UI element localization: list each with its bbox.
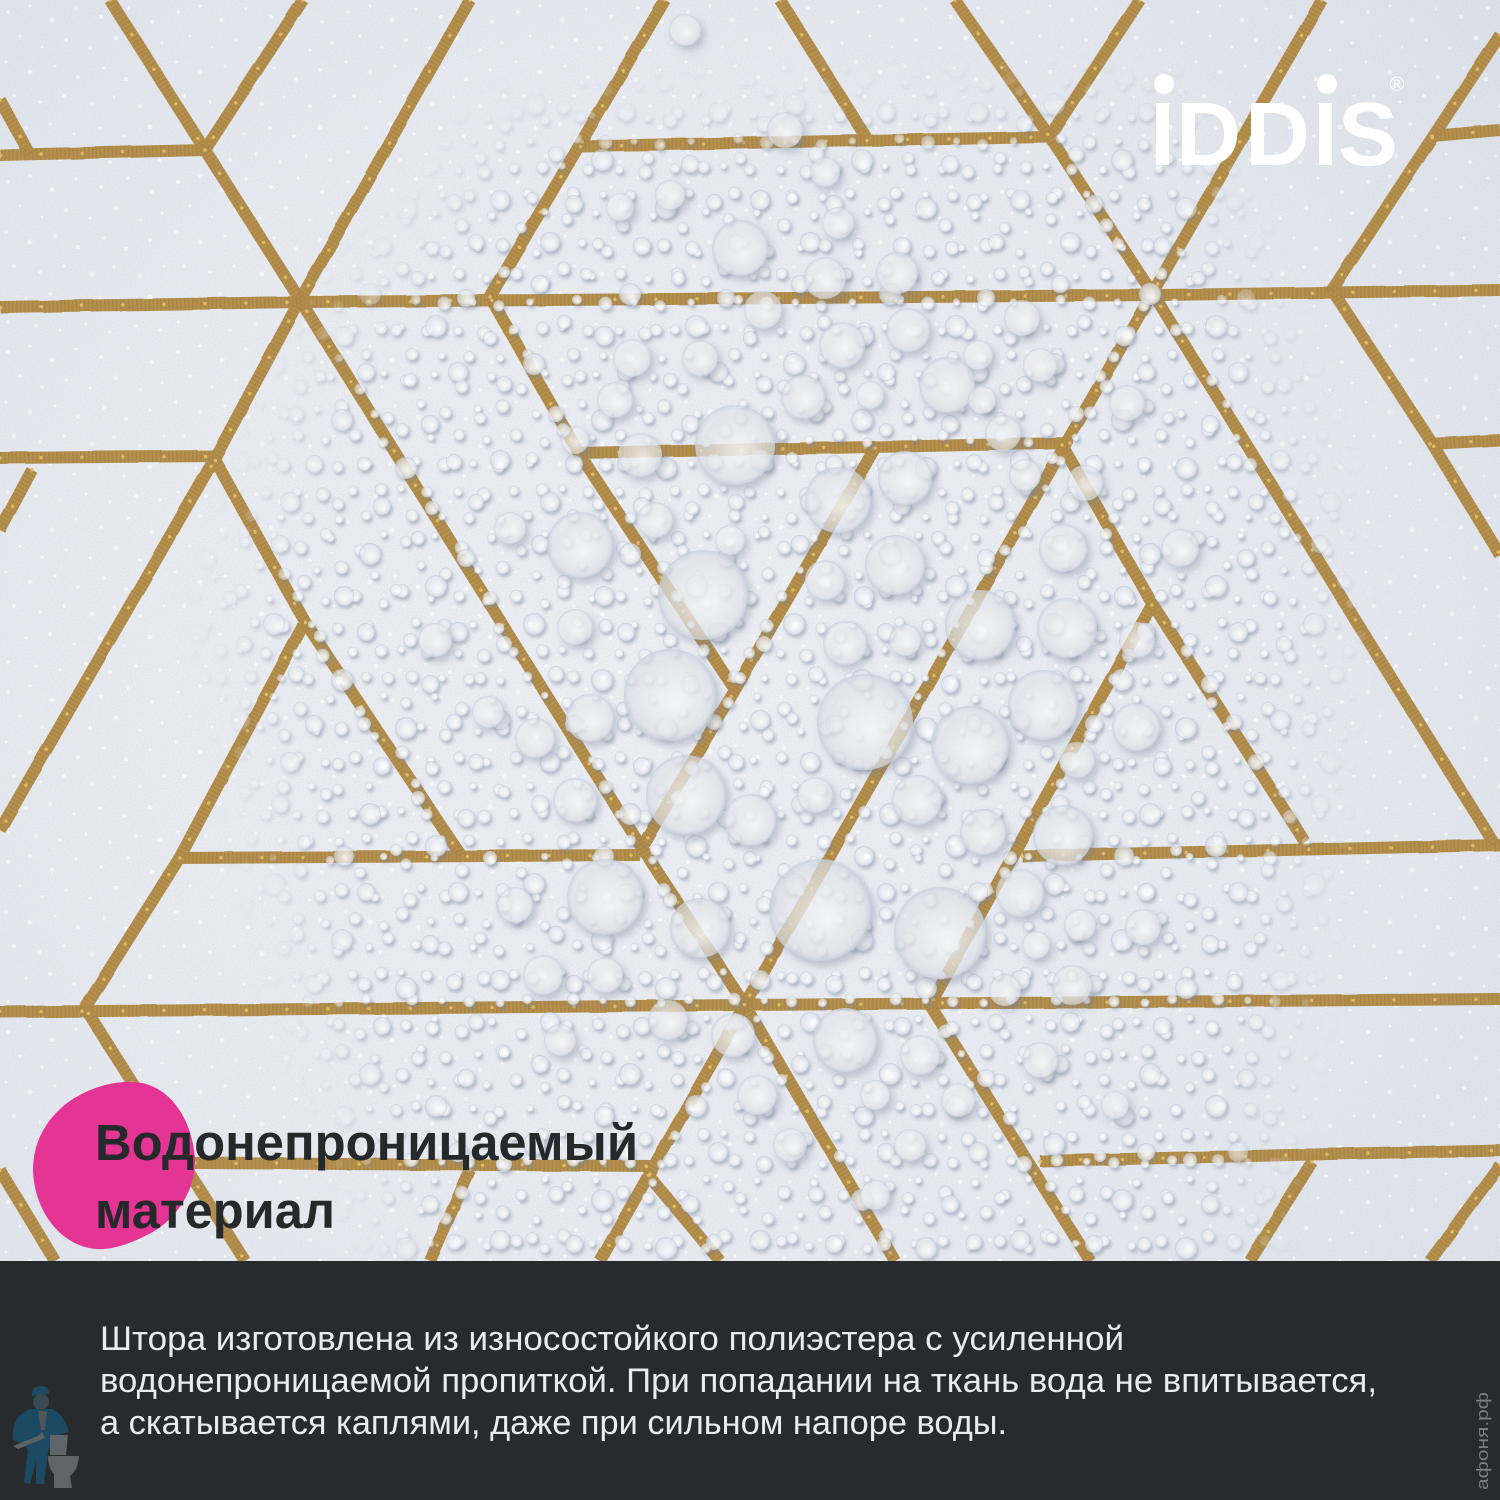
icon: plumber with toilet watermark [13, 1386, 79, 1488]
description text: а скатывается каплями, даже при сильном напоре воды. [100, 1404, 1007, 1442]
description text [100, 1320, 1377, 1442]
description text: Штора изготовлена из износостойкого полиэстера с усиленной [100, 1320, 1124, 1358]
description text: водонепроницаемой пропиткой. При попадании на ткань вода не впитывается, [100, 1362, 1377, 1400]
heading: материал [95, 1182, 335, 1239]
watermark: afonya.rf: афоня.рф [1473, 1392, 1492, 1490]
medium water droplets [220, 62, 1371, 1261]
large water droplets [418, 14, 1199, 1210]
pink blob accent [33, 1082, 195, 1249]
logo: IDDIS: ® [1390, 74, 1405, 96]
logo: IDDIS: IDDIS [1150, 85, 1398, 185]
heading [95, 1114, 638, 1239]
heading: Водонепроницаемый [95, 1114, 638, 1171]
panel: dark description band [0, 1261, 1500, 1500]
